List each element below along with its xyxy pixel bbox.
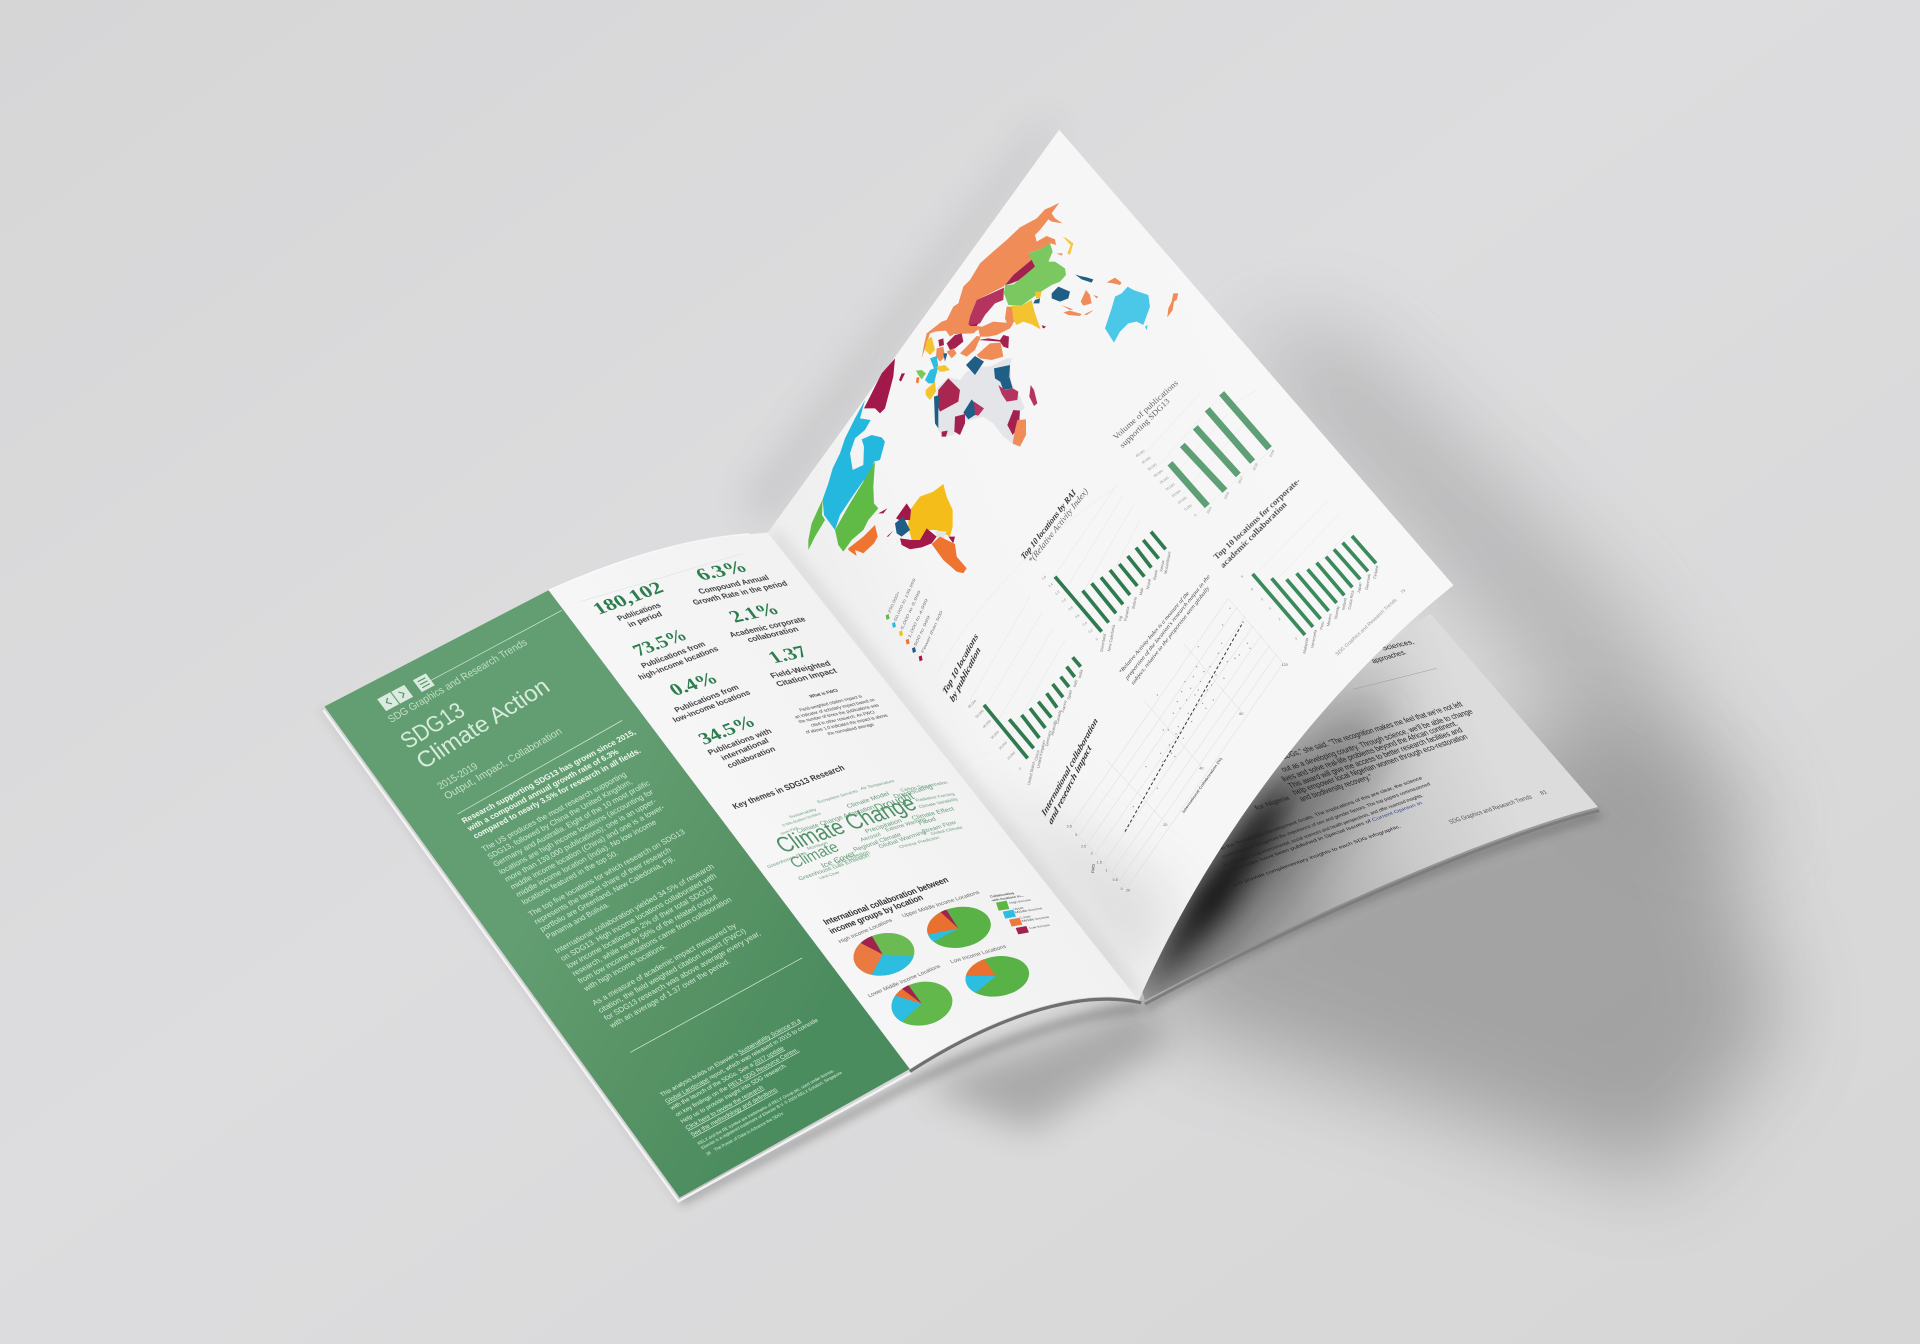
chart: top 10 corporate-academic collaboration: 6	[1250, 587, 1254, 591]
word cloud: Drought	[871, 790, 918, 814]
chart: top 10 locations by RAI: Kenya	[1158, 559, 1165, 572]
map legend: 500 to 999	[912, 614, 932, 647]
scatter axis labels: 3	[1075, 833, 1077, 837]
publication title: Top 10 locations	[940, 630, 980, 696]
corporate title: Top 10 locations for corporate-	[1212, 476, 1302, 561]
chart: top 10 locations by publication: Australia	[1050, 719, 1058, 736]
text block: research output: Germany and Australia. Eight of the 10 most prolific	[491, 779, 652, 869]
panel: green sidebar content	[377, 610, 860, 1157]
scatter axis labels: 0	[1121, 887, 1123, 891]
chart: top 10 locations by publication: Germany	[1044, 730, 1052, 747]
chart: top 10 locations by RAI: Mali	[1138, 588, 1144, 596]
chart: volume of publications: 40,000	[1141, 456, 1152, 465]
heading: international collaboration: income groups by location	[827, 893, 925, 936]
RAI footnote: *Relative Activity Index is a measure of the	[1118, 589, 1191, 675]
page footer: SDG Graphics and Research Trends	[1335, 597, 1399, 657]
pie legend: Collaborating	[989, 891, 1015, 899]
FWCI explanation: the number of times the publications was	[797, 703, 881, 724]
word cloud: Regional Climate	[852, 831, 903, 853]
text block: lead paragraph: Research supporting SDG13 has grown since 2015,	[460, 728, 638, 825]
chart: top 10 locations by RAI: Benin	[1152, 569, 1159, 580]
pie: lower middle income	[892, 982, 952, 1026]
key figure captions	[615, 573, 839, 770]
scatter axis labels: FWCI	[1091, 864, 1096, 873]
map legend	[886, 577, 944, 661]
RAI title: Top 10 locations by RAI	[1019, 487, 1078, 561]
chart: top 10 locations by publication: China	[1033, 749, 1040, 761]
word cloud: Precipitation	[864, 817, 904, 835]
chart: volume of publications: 25,000	[1159, 476, 1170, 485]
chart: volume of publications: 45,000	[1135, 449, 1146, 458]
pie legend: with locations in...	[990, 894, 1025, 902]
chart: top 10 locations by publication: India	[1077, 668, 1084, 679]
pie labels: Low Income Locations	[949, 944, 1008, 965]
chart: scatter collaboration vs impact	[1039, 598, 1288, 893]
text block: footer notes	[659, 1011, 860, 1157]
chart: top 10 corporate-academic collaboration: Mexico	[1325, 613, 1333, 627]
word cloud: Climate Effect	[910, 806, 956, 822]
scatter axis labels: 1.5	[1097, 860, 1102, 864]
text block: footer notes: RELX and the RE symbol are trademarks of RELX Group plc, used under license.	[696, 1068, 835, 1146]
word cloud: El Niño-Southern Oscillation	[781, 812, 822, 827]
chart: top 10 locations by RAI: 1.2	[1054, 590, 1060, 596]
RAI footnote	[1118, 572, 1212, 686]
corporate title: academic collaboration	[1218, 500, 1289, 570]
back page text: for Nigeria	[1253, 795, 1291, 812]
chart: volume of publications: 2017	[1237, 476, 1244, 484]
chart: top 10 locations by RAI: Bolivia	[1131, 596, 1138, 609]
chart: top 10 corporate-academic collaboration: 8	[1240, 574, 1244, 579]
text block: research output: locations featured in the top 50.	[520, 849, 620, 906]
chart: top 10 locations by publication: United States	[1026, 761, 1036, 785]
map: Asia and Oceania	[943, 203, 1178, 343]
key figure captions: Publications with	[706, 727, 774, 757]
chart: top 10 locations by publication: 30,000	[990, 730, 1000, 740]
chart: top 10 corporate-academic collaboration: 4	[1268, 606, 1272, 611]
word cloud: Global Climate	[929, 825, 965, 836]
chart: top 10 locations by publication: 60,000	[967, 699, 977, 709]
map legend: 250,000+	[886, 590, 901, 615]
text block: research output: The US produces the most research supporting	[480, 770, 628, 853]
word cloud: Climate Variability	[917, 797, 960, 809]
word cloud: Stream Flow	[921, 820, 959, 835]
panel: right page	[768, 130, 1453, 1000]
back page text: SDGs," she said. "The recognition makes me feel that we're not left	[1279, 700, 1465, 761]
FWCI explanation: cited in other research. An FWCI	[809, 710, 876, 728]
word cloud: Air Temperature	[859, 778, 896, 791]
word cloud: Climate Change	[770, 791, 922, 858]
panel: right page charts	[937, 378, 1407, 893]
word cloud: Flood	[917, 816, 938, 827]
scatter title	[1039, 715, 1100, 826]
word cloud: Aerosol	[859, 832, 883, 843]
key figure captions: Publications	[615, 601, 663, 623]
chart: volume of publications: 5,000	[1184, 503, 1193, 511]
publication title	[940, 630, 982, 704]
FWCI explanation: of above 1.0 indicates the impact is above	[804, 713, 889, 735]
chart: top 10 locations by publication: 20,000	[998, 741, 1008, 751]
map legend: 50,000 to 139,999	[892, 577, 917, 622]
text block: academic impact: with an average of 1.37 over the period.	[607, 957, 732, 1030]
word cloud: Monsoon	[806, 840, 830, 851]
heading: key themes: Key themes in SDG13 Research	[730, 763, 847, 811]
back page text: lives and solve real-life problems beyond the African continent.	[1280, 719, 1460, 783]
text block: footer notes: Global Landscape report, which was released in 2015 to coincide	[664, 1018, 820, 1105]
back page text	[1219, 637, 1549, 888]
scatter axis labels: 20	[1163, 823, 1167, 827]
word cloud: Gas Emission	[834, 850, 872, 866]
heading: international collaboration: International collaboration between	[821, 875, 950, 927]
pie legend: Lower	[1019, 914, 1033, 920]
key figure captions: Publications from	[639, 640, 707, 670]
text block: academic impact: As a measure of academic impact measured by	[590, 921, 738, 1007]
key figure captions: Academic corporate	[727, 615, 808, 639]
chart: top 10 corporate-academic collaboration: Ireland	[1341, 598, 1348, 610]
title: SDG13	[395, 697, 470, 753]
key figures: 0.4%	[665, 668, 722, 700]
chart: top 10 locations by RAI: 0.6	[1074, 613, 1080, 619]
chart: top 10 locations by RAI: Panama	[1123, 605, 1130, 621]
scatter points	[1133, 608, 1251, 807]
key figure captions: low-income locations	[671, 688, 753, 724]
chart: top 10 locations by RAI: 1.0	[1061, 597, 1067, 603]
text block: footer notes: This analysis builds on Elsevier's Sustainability Science in a	[659, 1018, 803, 1098]
panel: world map	[808, 203, 1178, 573]
word cloud: Climate Model	[845, 791, 891, 810]
text block: footer notes: on key findings on the RELX SDG Resource Centre.	[675, 1047, 800, 1118]
chart: volume of publications: 35,000	[1147, 462, 1158, 471]
FWCI explanation: What is FWCI	[808, 688, 839, 699]
key figures	[589, 557, 812, 748]
chart: volume of publications: 10,000	[1177, 496, 1188, 505]
chart: volume of publications: 2016	[1223, 491, 1230, 500]
panel: collaboration pie charts	[820, 875, 1051, 1038]
chart: top 10 locations by publication	[940, 597, 1084, 785]
chart: top 10 locations by publication: 0	[1018, 766, 1022, 771]
word cloud: Snow Pack	[780, 826, 799, 836]
key figures: 73.5%	[628, 625, 691, 660]
page guide line	[937, 390, 1257, 673]
word cloud: Land Cover	[817, 870, 841, 880]
text block: footer notes: 38 The Power of Data to Advance the SDGs	[705, 1111, 784, 1157]
chart: top 10 locations by publication: Italy	[1072, 679, 1078, 687]
key figures: 2.1%	[725, 600, 784, 627]
scatter title: and research impact	[1046, 742, 1093, 826]
pie legend	[989, 891, 1051, 934]
scatter axis labels: 3.5	[1067, 824, 1072, 828]
chart: volume of publications: 20,000	[1165, 482, 1176, 491]
word cloud: Downscaling	[892, 784, 935, 800]
pie labels	[838, 890, 1008, 999]
title: Climate Action	[411, 673, 554, 774]
chart: top 10 locations by publication: Canada	[1055, 709, 1062, 725]
chart: volume of publications: 2018	[1252, 463, 1259, 471]
scatter axis labels	[1067, 663, 1288, 893]
chart: top 10 corporate-academic collaboration: Peru	[1319, 621, 1325, 630]
chart: top 10 corporate-academic collaboration: Finland	[1372, 565, 1379, 579]
pie legend: Upper	[1012, 906, 1026, 911]
text block: collaboration: low income locations on 2% of their total SDG13	[564, 884, 715, 970]
word cloud: Carbon Sequestration	[899, 780, 949, 792]
subtitle: Output, Impact, Collaboration	[442, 726, 565, 802]
chart: top 10 corporate-academic collaboration	[1212, 476, 1407, 657]
text block: academic impact: citation, the field weighted citation impact (FWCI)	[596, 926, 748, 1015]
map legend: 1,000 to 4,999	[906, 597, 929, 639]
chart: top 10 locations by RAI: 1.4	[1048, 582, 1054, 588]
scatter axis labels: 1	[1105, 869, 1107, 873]
text block: collaboration	[552, 862, 745, 993]
RAI title: *(Relative Activity Index)	[1027, 486, 1090, 565]
map: Americas and Greenland	[808, 358, 967, 573]
chart: volume of publications: 2019	[1269, 449, 1275, 458]
text block: research output: SDG13, followed by China the United Kingdom,	[486, 778, 634, 861]
back page text: approaches.	[1369, 648, 1408, 665]
chart: top 10 corporate-academic collaboration: 0	[1294, 636, 1298, 641]
chart: top 10 corporate-academic collaboration: Norway	[1333, 605, 1340, 619]
scatter title: International collaboration	[1039, 715, 1100, 819]
FWCI explanation	[793, 688, 889, 736]
pie legend: Low Income	[1028, 923, 1051, 930]
text block: collaboration: from low income locations came from collaboration	[576, 895, 733, 985]
word cloud: Chinese Prediction	[897, 835, 941, 849]
key figure captions: collaboration	[745, 625, 801, 644]
running head: SDG Graphics and Research Trends	[386, 637, 530, 725]
text block: footer notes: See the methodology and definitions	[690, 1087, 779, 1138]
chart: volume of publications: Volume of publications	[1111, 378, 1180, 441]
chart: top 10 locations by RAI: 0.8	[1068, 605, 1074, 611]
back page text: out as a developing country. Through science, we'll be able to change	[1279, 707, 1475, 774]
key figure captions: Publications from	[672, 683, 741, 714]
back page text: and provide complementary insights to each SDG infographic.	[1231, 824, 1403, 888]
pie labels: Upper Middle Income Locations	[901, 890, 981, 919]
pie: high income	[854, 933, 914, 976]
map legend: 5,000 to 9,999	[899, 588, 922, 630]
word cloud: Ice Cover	[819, 849, 858, 870]
chart: top 10 corporate-academic collaboration: 5	[1260, 597, 1264, 601]
chart: volume of publications: supporting SDG13	[1118, 397, 1172, 450]
chart: volume of publications: 2015	[1206, 506, 1213, 514]
text block: research output: locations are high income locations (accounting for	[497, 787, 655, 876]
text block: footer notes: with the launch of the SDGs. See a 2017 update	[669, 1045, 786, 1112]
text block: top five locations: represents the largest share of their research	[532, 846, 673, 926]
scatter axis labels: 2	[1091, 852, 1093, 856]
scatter axis labels: 120	[1282, 663, 1288, 667]
word cloud: Greenhouse Gas	[766, 850, 808, 869]
chart: volume of publications: 30,000	[1153, 469, 1164, 478]
subtitle: 2015-2019	[436, 761, 481, 792]
text block: collaboration: with high income locations.	[581, 942, 668, 993]
word cloud: Ecosystem Services	[816, 789, 859, 804]
chart: top 10 locations by RAI	[1019, 485, 1172, 652]
pie: low income	[966, 956, 1030, 997]
pie legend: High Income	[1008, 898, 1032, 905]
chart: top 10 corporate-academic collaboration: Japan	[1356, 582, 1363, 594]
chart: top 10 locations by publication: 50,000	[975, 709, 985, 719]
text block: academic impact: for SDG13 research was above average every year,	[602, 929, 763, 1022]
word cloud: Radiative Forcing	[914, 791, 956, 802]
text block: top five locations: Panama and Bolivia.	[544, 900, 611, 941]
scatter axis labels: 20	[1126, 889, 1130, 893]
chart: top 10 locations by publication: 40,000	[982, 719, 992, 729]
scatter axis labels: 60	[1239, 712, 1243, 716]
back page text: to the Sustainable Development Goals. The implications of this are clear, the science	[1219, 775, 1424, 852]
back page text: 81	[1539, 790, 1549, 797]
key figure captions: collaboration	[725, 745, 777, 770]
text block: research output: middle income location (China) and one is a lower-	[508, 803, 667, 891]
chart: top 10 locations by publication: United Kingdom	[1036, 739, 1046, 769]
chart: top 10 locations by publication: Spain	[1066, 689, 1073, 700]
pie legend: Middle Income	[1021, 915, 1051, 923]
word cloud: Global Warming	[877, 830, 928, 850]
scatter axis labels: 40	[1199, 766, 1203, 770]
chart: top 10 locations by RAI: Greenland	[1099, 633, 1107, 652]
key figures: 1.37	[764, 642, 812, 668]
chart: top 10 locations by publication: France	[1060, 699, 1068, 713]
text block: footer notes: Elsevier is a registered trademark of Elsevier B.V. © 2020 RELX Solution: Singapore	[700, 1070, 843, 1150]
chart: top 10 locations by RAI: 0	[1095, 637, 1099, 641]
chart: top 10 locations by RAI: 1.6	[1041, 575, 1047, 581]
text block: research output: more than 139,000 publications); one is an upper-	[503, 796, 659, 884]
text block: lead paragraph: compared to nearly 3.5% for research in all fields.	[471, 746, 643, 841]
chart: top 10 corporate-academic collaboration: Costa Rica	[1347, 589, 1355, 610]
scatter axis labels: 0.5	[1113, 878, 1118, 882]
chart: top 10 corporate-academic collaboration: 2	[1278, 617, 1282, 621]
chart: top 10 locations by RAI: Mozambique	[1163, 550, 1172, 574]
word cloud: Sustainability	[788, 808, 818, 819]
text block: research output: middle income location (India). No low income	[514, 818, 658, 899]
panel: left page	[323, 533, 1141, 1201]
RAI footnote: proportion of the location's research output in the	[1123, 572, 1212, 682]
key figure captions: international	[719, 736, 771, 762]
key figure captions: high-income locations	[636, 644, 721, 682]
publication title: by publication	[948, 644, 982, 704]
key figures: 180,102	[589, 578, 667, 618]
back page text: help empower local Nigerian women through eco-restoration	[1291, 733, 1470, 797]
chart: volume of publications: 0	[1194, 513, 1198, 517]
text block: top five locations: portfolio are Greenland, New Caledonia, Fiji,	[538, 854, 677, 933]
chart: top 10 corporate-academic collaboration: Venezuela	[1309, 629, 1318, 648]
map: Africa, Middle East and Europe	[916, 319, 1046, 447]
key figure captions: Growth Rate in the period	[691, 579, 790, 607]
text block: top five locations: The top five locations for which research on SDG13	[526, 828, 687, 918]
key figure captions: Citation Impact	[774, 666, 839, 688]
chart: top 10 locations by RAI: 0.2	[1088, 628, 1094, 634]
FWCI explanation: Field-weighted citation impact is	[798, 694, 864, 712]
chart: top 10 corporate-academic collaboration: Denmark	[1364, 573, 1372, 590]
word cloud	[766, 778, 965, 882]
scatter axis labels: 2.5	[1081, 845, 1086, 849]
pie legend: Middle Income	[1014, 906, 1044, 914]
chart: volume of publications: 15,000	[1171, 489, 1182, 498]
map legend: Fewer than 500	[920, 609, 944, 654]
text block: collaboration: research, while nearly 56% of the related output	[570, 892, 720, 978]
back page text: and biodiversity recovery."	[1297, 773, 1375, 803]
key figures: 34.5%	[694, 712, 759, 748]
chart: top 10 corporate-academic collaboration: Malaysia	[1302, 637, 1309, 654]
chart: top 10 locations by RAI: Fiji	[1117, 615, 1123, 621]
brochure mockup scene	[322, 130, 1832, 1236]
text block: collaboration: International collaboration yielded 34.5% of research	[553, 862, 716, 955]
cast shadows	[322, 120, 1780, 1202]
word cloud: Greenhouse Gas Emission	[798, 853, 871, 882]
FWCI explanation: the normalised average	[826, 722, 876, 736]
chart: top 10 corporate-academic collaboration: 79	[1400, 587, 1407, 595]
text block: footer notes: Click here to review the research	[685, 1085, 765, 1132]
back page text: These articles have been published in Special Issues of Current Opinion in	[1219, 800, 1424, 877]
back page text: community has recognised the importance of sex and gender factors. The top papers commissioned	[1221, 782, 1432, 860]
pie labels: High Income Locations	[838, 918, 894, 945]
chart: top 10 locations by publication: 10,000	[1006, 751, 1016, 761]
back page text: This award will give me access to better research facilities and	[1286, 726, 1465, 790]
word cloud: Climate	[786, 839, 843, 872]
key figures: 6.3%	[692, 557, 752, 585]
back page, lower right	[1142, 628, 1600, 1006]
chart: top 10 locations by RAI: 0.4	[1082, 621, 1088, 627]
back page text: SDG Graphics and Research Trends	[1448, 794, 1534, 826]
text block: lead paragraph: with a compound annual growth rate of 6.3%	[465, 747, 621, 833]
chart: top 10 locations by RAI: Nepal	[1145, 579, 1152, 590]
key figure captions: Field-Weighted	[768, 659, 833, 680]
pie labels: Lower Middle Income Locations	[867, 964, 942, 999]
chart: volume of publications	[1111, 378, 1275, 517]
FWCI explanation: an indicator of scholarly impact based on	[793, 697, 876, 719]
key figure captions: Compound Annual	[696, 573, 771, 596]
text block: footer notes: Help us to provide insight into SDG research.	[680, 1063, 789, 1125]
back page text: Sciences,	[1379, 637, 1416, 652]
text block: research output	[480, 764, 680, 906]
text block: collaboration: on SDG13. High income locations collaborated with	[559, 872, 718, 963]
pie: upper middle income	[927, 906, 991, 948]
back page text: for this report bring environmental, social sciences and health perspectives, and offer nuanced insights.	[1222, 793, 1425, 868]
scatter axis labels: International Collaboration (%)	[1182, 756, 1224, 814]
key figure captions: in period	[626, 610, 664, 629]
word cloud: Climate Change Adaptation	[795, 804, 877, 835]
icon: navigation buttons	[377, 673, 435, 711]
panel: key metrics and word cloud	[580, 553, 965, 882]
RAI footnote: subject, relative to the proportion seen globally	[1131, 585, 1211, 686]
chart: top 10 locations by RAI: New Caledonia	[1106, 624, 1116, 652]
word cloud: Extreme Warming	[884, 817, 928, 833]
